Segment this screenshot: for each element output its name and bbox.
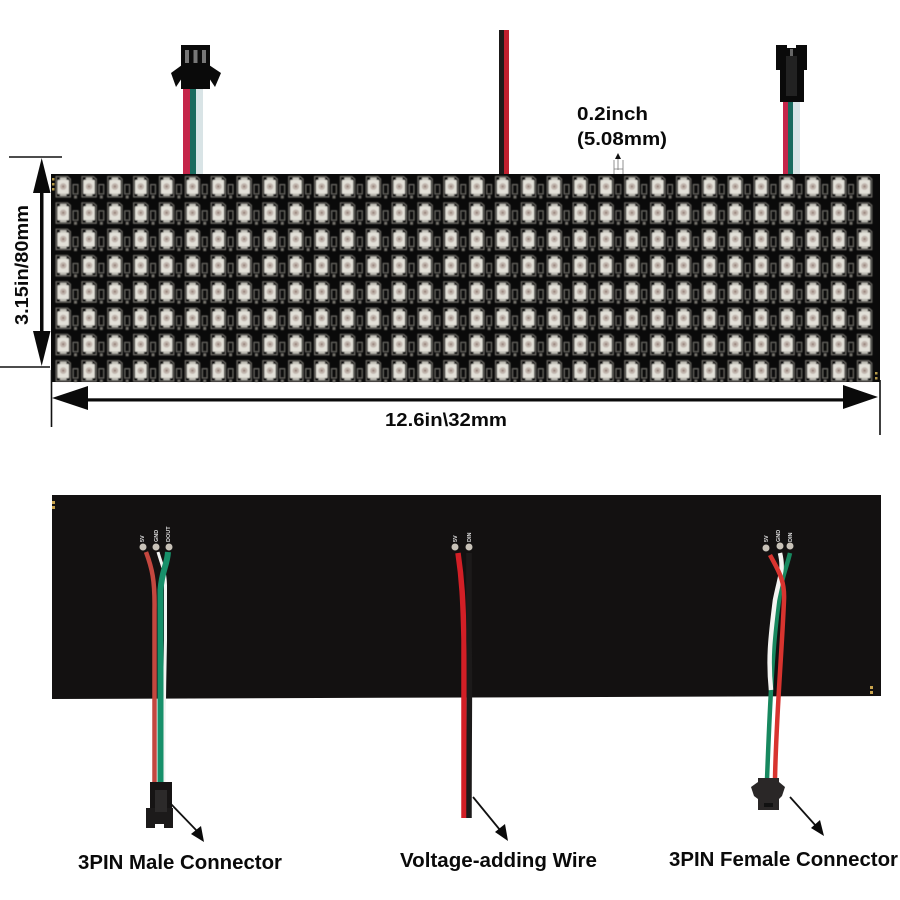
label: Voltage-adding Wire: Voltage-adding Wire bbox=[400, 850, 597, 872]
pitch callout: 0.2 inch: 0.2inch bbox=[577, 103, 648, 124]
pad labels: right group: DIN bbox=[788, 532, 794, 542]
corner pads bbox=[52, 178, 878, 380]
pad labels: centre group bbox=[453, 532, 473, 542]
wires: female connector lead, back bbox=[767, 553, 790, 780]
wire: voltage-adding lead, back bbox=[458, 553, 469, 818]
icon: 3-pin male connector, back bbox=[146, 782, 173, 828]
wires: male connector lead, back bbox=[146, 552, 168, 785]
panel: LED matrix front bbox=[51, 174, 880, 382]
dimension: panel height 3.15in/80mm bbox=[0, 157, 62, 367]
pad labels: right group bbox=[764, 530, 794, 542]
pad labels: right group: 5V bbox=[764, 535, 770, 542]
corner pads bbox=[52, 501, 873, 694]
wire: female connector lead, top bbox=[783, 100, 800, 176]
label: 3PIN Male Connector: 3PIN Male Connector bbox=[78, 852, 282, 874]
arrow: voltage wire pointer bbox=[473, 797, 508, 841]
pad labels: right group: GND bbox=[776, 530, 782, 542]
wire: male connector lead, top bbox=[183, 88, 203, 178]
arrow: female connector pointer bbox=[790, 797, 824, 836]
dimension: panel height 3.15in/80mm: 3.15in/80mm bbox=[11, 205, 32, 325]
pitch callout: 0.2 inch bbox=[577, 103, 667, 174]
solder pads bbox=[140, 542, 794, 552]
pad labels: left group: 5V bbox=[140, 535, 146, 542]
dimension: panel width 12.6in\32mm: 12.6in\32mm bbox=[385, 409, 507, 430]
pad labels: left group bbox=[140, 526, 172, 542]
dimension: panel width 12.6in\32mm bbox=[52, 370, 880, 435]
wire: voltage-adding lead, top bbox=[499, 30, 509, 176]
label: 3PIN Female Connector: 3PIN Female Connector bbox=[669, 849, 898, 871]
icon: 3-pin female connector, back bbox=[751, 778, 785, 810]
pad labels: centre group: 5V bbox=[453, 535, 459, 542]
top wires and connectors bbox=[171, 30, 807, 178]
arrow: male connector pointer bbox=[170, 803, 204, 842]
panel: matrix back side bbox=[52, 495, 881, 699]
icon: 3-pin connector, top right bbox=[776, 45, 807, 102]
icon: 3-pin connector, top left bbox=[171, 45, 221, 89]
pad labels: centre group: DIN bbox=[467, 532, 473, 542]
pitch callout: 0.2 inch: (5.08mm) bbox=[577, 128, 667, 149]
pad labels: left group: GND bbox=[154, 530, 160, 542]
LED grid: 8 rows by 32 columns bbox=[53, 174, 873, 382]
pad labels: left group: DOUT bbox=[166, 526, 172, 542]
